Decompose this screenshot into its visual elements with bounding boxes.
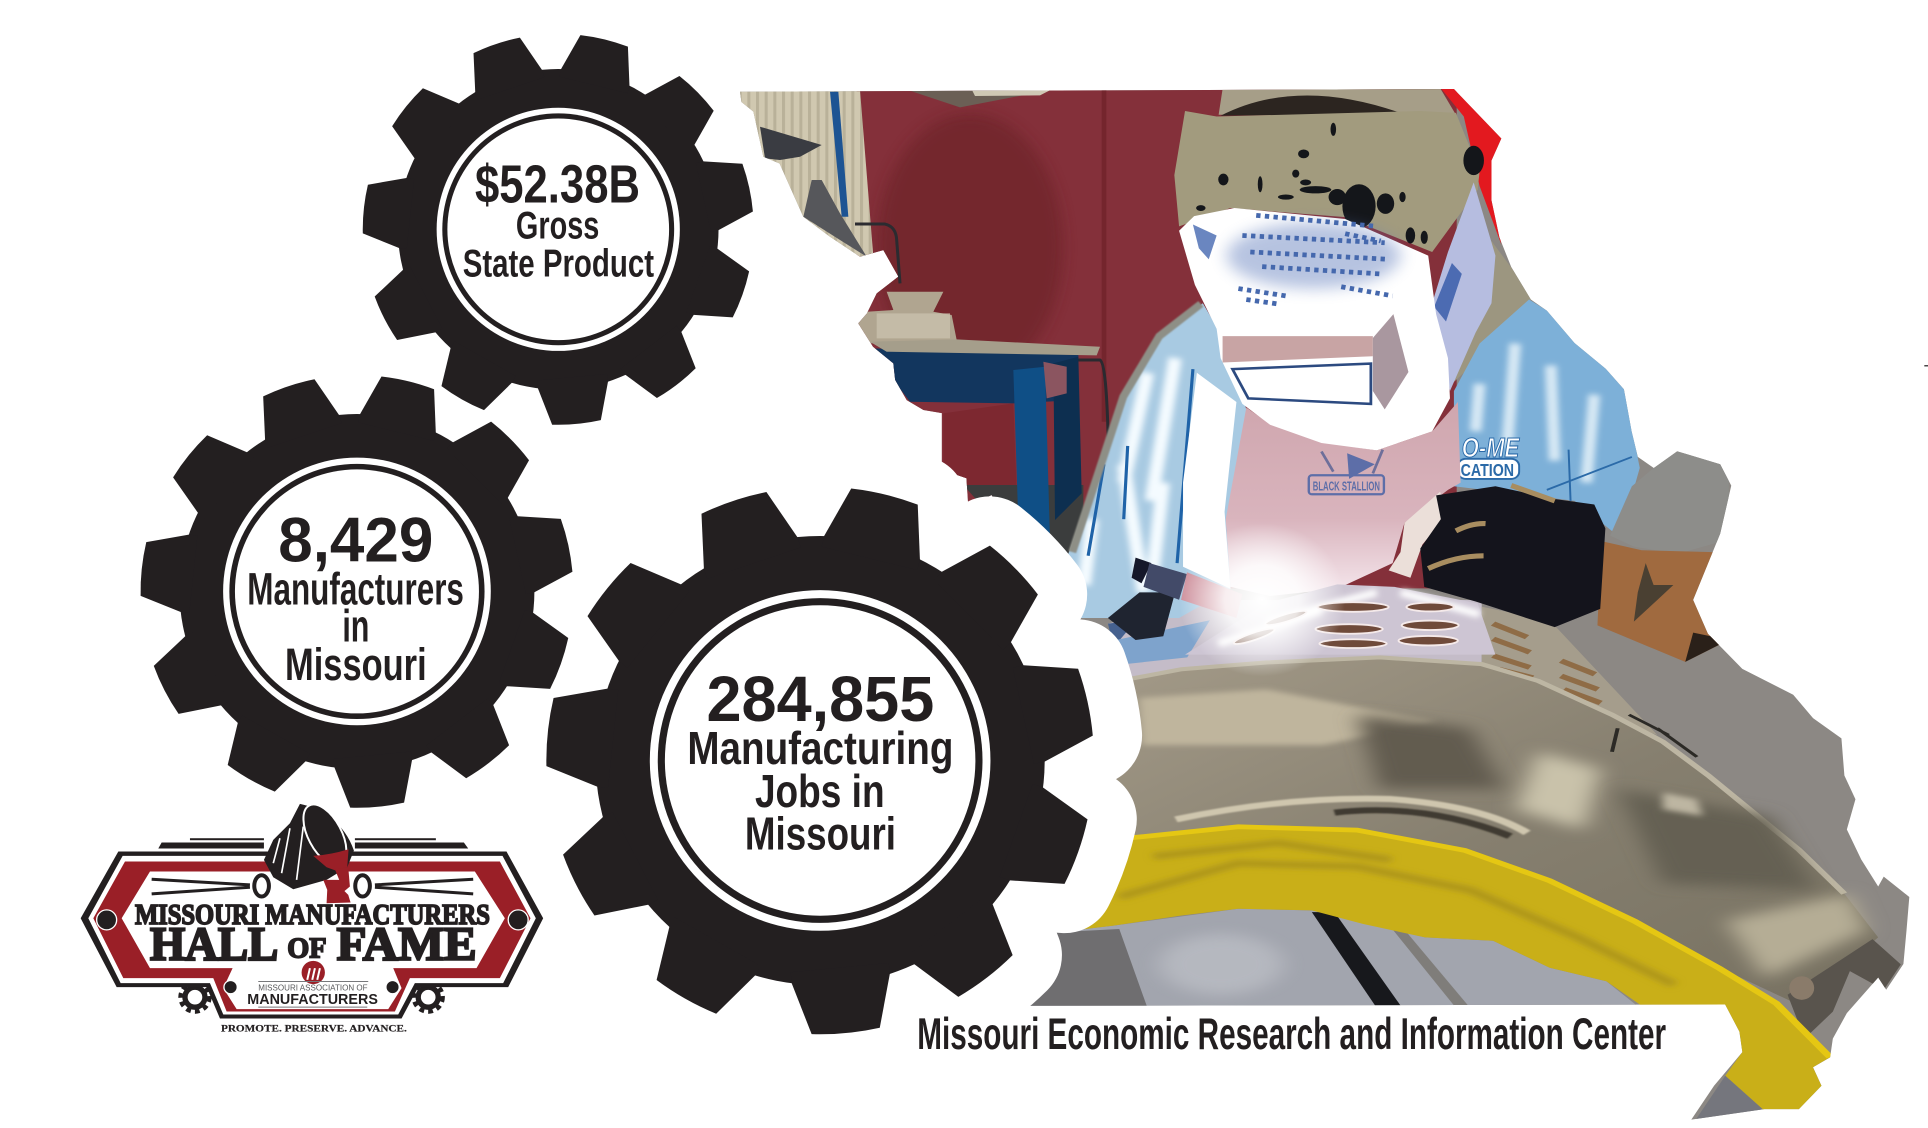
gear shape (360, 31, 757, 427)
logo association mark (247, 961, 378, 1008)
gear shape (138, 372, 577, 810)
apron logo: BLACK STALLION (1313, 479, 1380, 494)
logo badge frame (81, 852, 543, 1018)
helmet blue speckle (1238, 215, 1393, 304)
panel: Missouri-shaped welder photo (725, 74, 1928, 1128)
logo name: MISSOURI MANUFACTURERS (135, 900, 490, 931)
logo association mark: MISSOURI ASSOCIATION OF (258, 984, 368, 993)
logo: Missouri Manufacturers Hall of Fame (81, 798, 543, 1034)
stat label (247, 563, 464, 690)
welding torch (1108, 558, 1242, 640)
logo tagline: PROMOTE. PRESERVE. ADVANCE. (221, 1023, 407, 1034)
logo name (135, 900, 490, 971)
gear: manufacturers (138, 372, 577, 810)
stat label: in (342, 601, 369, 652)
gear: gross state product (360, 31, 757, 427)
perforated top panel (1185, 584, 1495, 655)
side panel slots (1493, 624, 1601, 703)
stat label: State Product (463, 242, 654, 286)
logo name: OF (287, 934, 327, 965)
shirt lettering (1458, 433, 1520, 480)
gear centre ring (437, 108, 680, 351)
photo: welder with helmet, shirt and apron (1066, 87, 1729, 677)
gear: manufacturing jobs (543, 483, 1098, 1038)
photo: workshop background (730, 88, 1457, 588)
area under the yellow band (1023, 909, 1640, 1008)
logo hex nuts (97, 910, 528, 994)
weld glow (1179, 523, 1345, 677)
gear shape (543, 483, 1098, 1038)
gear centre ring (650, 590, 990, 931)
stat label (463, 203, 654, 286)
stat label: Manufacturers (247, 563, 464, 614)
logo name: HALL (150, 918, 278, 971)
photo: metal ring (1023, 600, 1901, 1126)
logo tongs (152, 875, 473, 897)
stat label: Missouri (285, 639, 427, 690)
ring end bracket (1788, 939, 1901, 1039)
stat value: $52.38B (475, 155, 640, 215)
stat label (687, 722, 953, 860)
stat value: 284,855 (707, 663, 934, 735)
helmet paint chips (1196, 123, 1484, 244)
stat label: Missouri (745, 808, 896, 860)
logo ladle (264, 798, 355, 903)
shirt lettering: O-ME (1462, 433, 1520, 464)
stat value: 8,429 (278, 506, 433, 576)
logo top bars (158, 838, 468, 849)
logo name: FAME (337, 918, 477, 971)
logo small gears (181, 983, 442, 1011)
gear centre ring (223, 458, 491, 725)
yellow band (1057, 826, 1830, 1116)
logo association mark: MANUFACTURERS (247, 992, 378, 1008)
shirt lettering: CATION (1461, 460, 1514, 480)
white gear outline cutting into the photo (543, 483, 1098, 1038)
stat label: Manufacturing (687, 722, 953, 774)
stat label: Jobs in (755, 765, 885, 817)
apron logo (1309, 450, 1384, 494)
stat label: Gross (516, 203, 599, 247)
